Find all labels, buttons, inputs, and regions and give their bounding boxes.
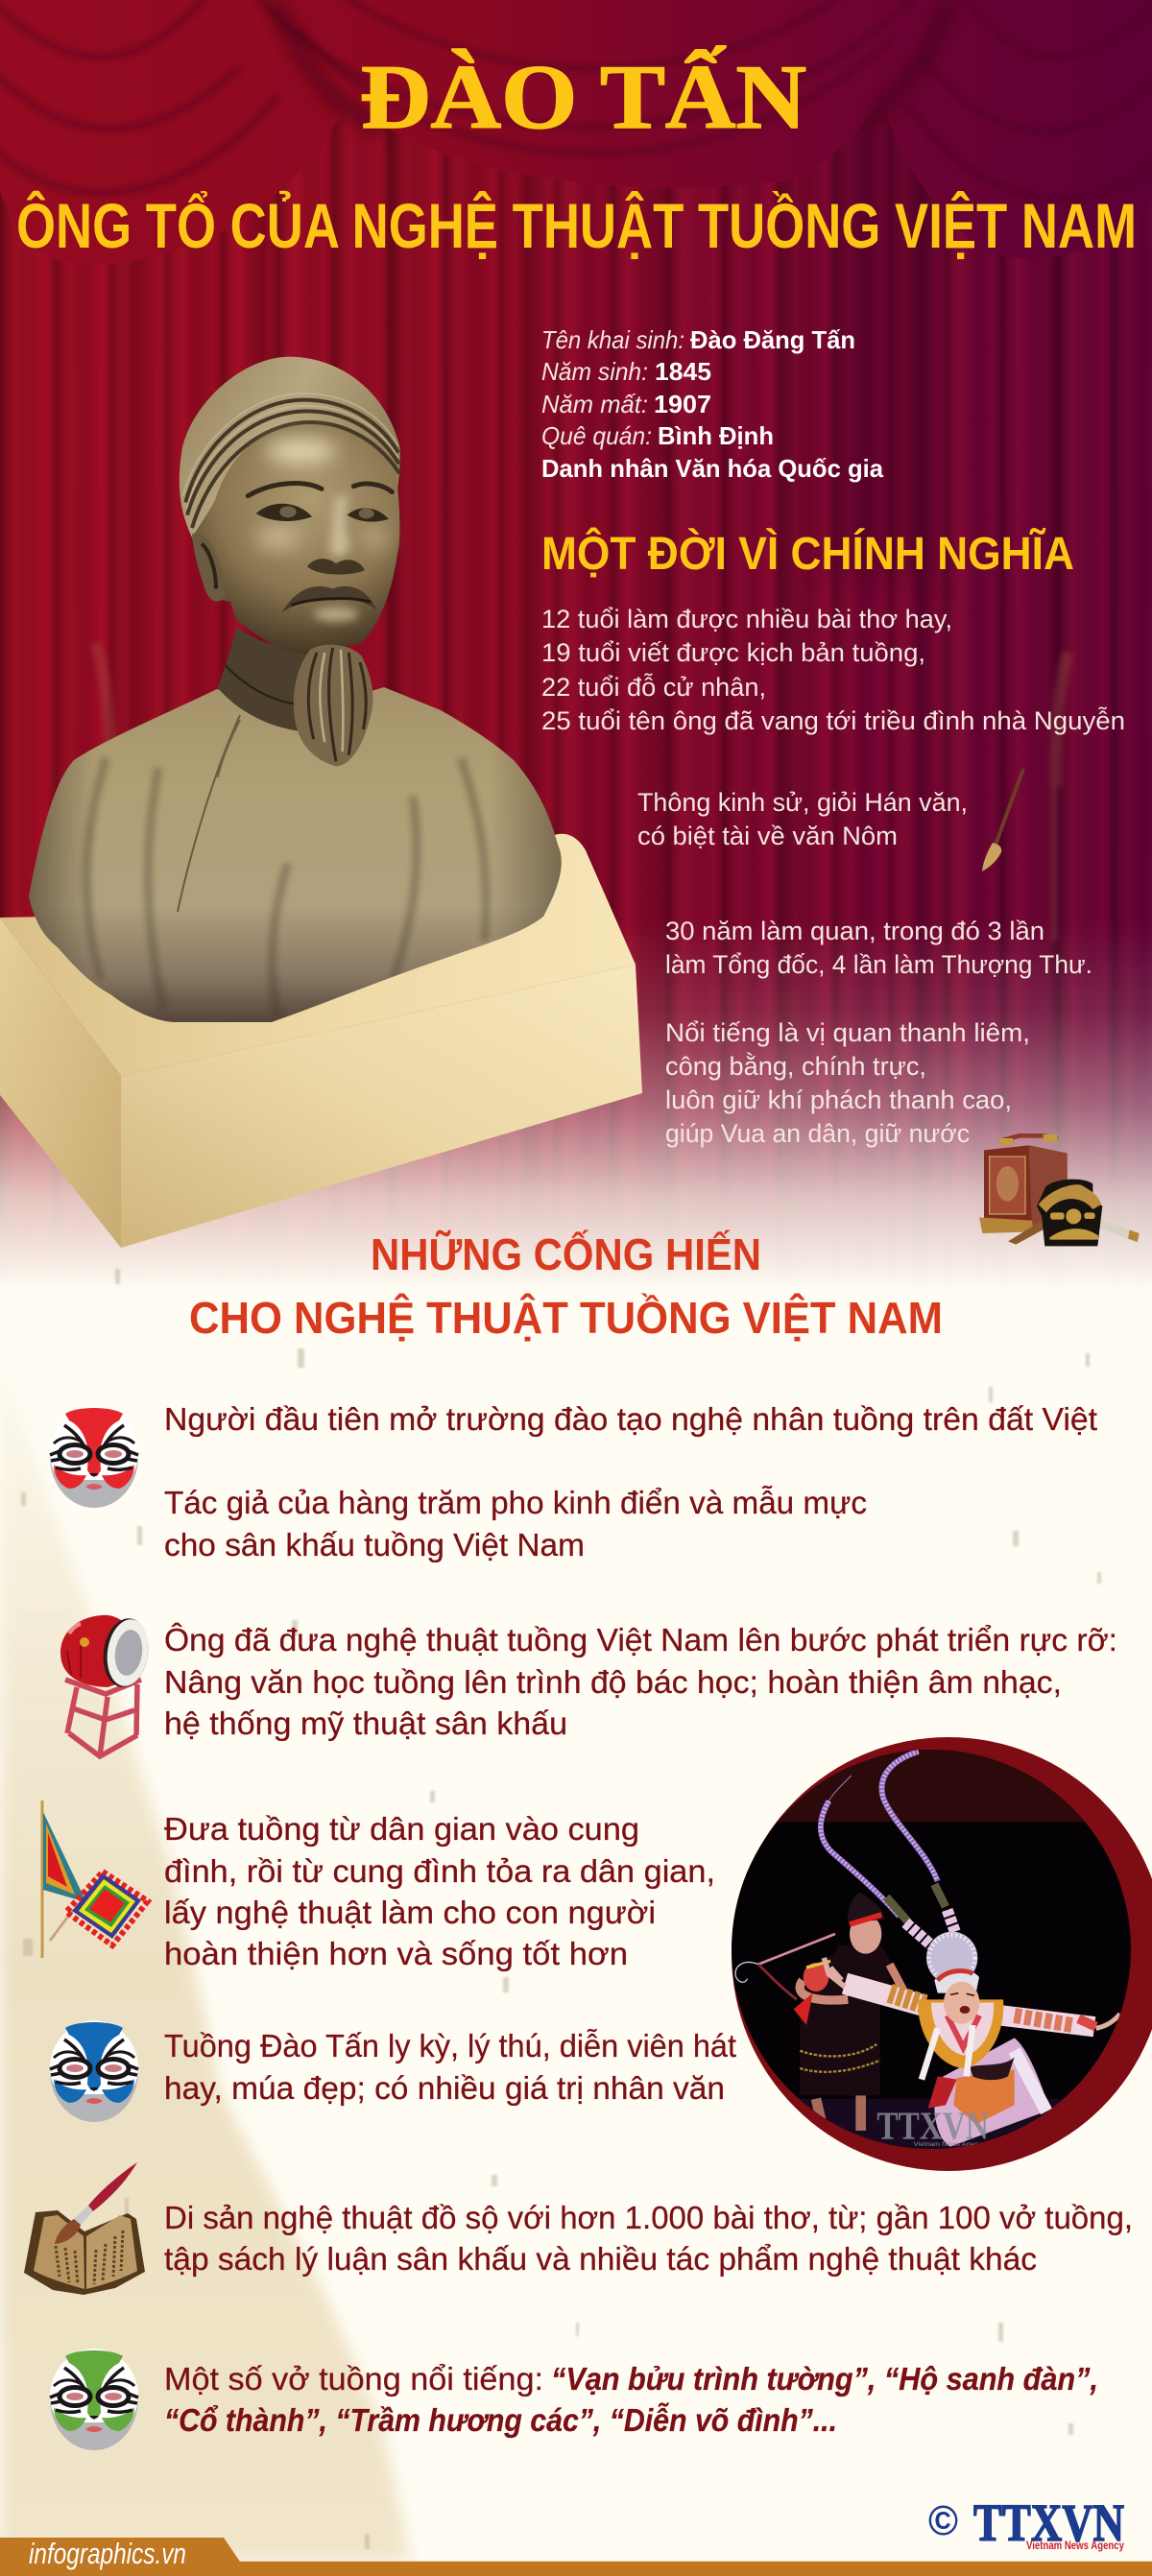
text: court and people: Đưa tuồng từ dân gian vào cung: [164, 1811, 639, 1847]
text: court and people: [164, 1811, 715, 1971]
icon: drum on stand: [60, 1615, 153, 1756]
icon: red opera mask: [50, 1406, 138, 1508]
biography facts: Năm mất:: [541, 390, 648, 418]
text block: career: công bằng, chính trực,: [665, 1051, 926, 1081]
biography facts: 1845: [655, 357, 711, 386]
text block: early life: [541, 605, 1125, 735]
text: famous plays: [164, 2361, 1098, 2438]
photo: tuong performers in a circle: [730, 1737, 1152, 2171]
text: famous plays: “Cổ thành”, “Trầm hương các”, “Diễn võ đình”...: [164, 2402, 837, 2438]
eyebrows: [248, 484, 392, 496]
text: famous plays: “Vạn bửu trình tường”, “Hộ sanh đàn”,: [551, 2361, 1098, 2397]
eyes: [256, 504, 312, 521]
text block: career: luôn giữ khí phách thanh cao,: [665, 1085, 1012, 1114]
logo: TTXVN: Vietnam News Agency: [1026, 2539, 1124, 2552]
biography facts: Quê quán:: [541, 421, 652, 450]
biography facts: Năm sinh:: [541, 357, 648, 386]
title: ĐÀO TẤN: [360, 46, 806, 148]
icon: flags: [42, 1801, 148, 1958]
section heading: contributions: NHỮNG CỐNG HIẾN: [371, 1229, 761, 1279]
biography facts: Bình Định: [658, 421, 774, 450]
text block: career: giúp Vua an dân, giữ nước: [665, 1119, 970, 1148]
face: [192, 420, 399, 655]
icon: old book and brush: [24, 2162, 145, 2295]
text: developing the art: Nâng văn học tuồng lên trình độ bác học; hoàn thiện âm nhạc,: [164, 1664, 1062, 1700]
pedestal: [0, 834, 642, 1248]
bronze statue: [19, 357, 566, 1027]
text block: early life: 22 tuổi đỗ cử nhân,: [541, 672, 766, 702]
text: first school and author: [164, 1401, 1097, 1562]
text: developing the art: Ông đã đưa nghệ thuật tuồng Việt Nam lên bước phát triển rực rỡ:: [164, 1622, 1117, 1658]
icon: writing brush: [982, 769, 1023, 871]
moustache: [281, 586, 377, 612]
turban: [180, 357, 400, 540]
text: appealing shows: [164, 2028, 736, 2106]
text block: career: 30 năm làm quan, trong đó 3 lần: [665, 917, 1044, 945]
logo: TTXVN: ©: [928, 2497, 958, 2544]
biography facts: Tên khai sinh:: [541, 325, 684, 354]
biography facts: Đào Đăng Tấn: [690, 325, 855, 354]
staff: [758, 1934, 835, 1965]
text block: scholarship: [637, 788, 968, 850]
text: heritage: tập sách lý luận sân khấu và nhiều tác phẩm nghệ thuật khác: [164, 2241, 1037, 2277]
icon: blue opera mask: [50, 2020, 138, 2122]
text: heritage: Di sản nghệ thuật đồ sộ với hơn 1.000 bài thơ, từ; gần 100 vở tuồng,: [164, 2200, 1133, 2235]
text: court and people: lấy nghệ thuật làm cho con người: [164, 1895, 656, 1930]
text block: scholarship: Thông kinh sử, giỏi Hán văn,: [637, 788, 968, 817]
beard: [294, 645, 372, 766]
biography facts: [541, 325, 884, 483]
icon: mandarin box and hat: [979, 1134, 1140, 1246]
heading: a life for justice: MỘT ĐỜI VÌ CHÍNH NGHĨA: [541, 527, 1074, 580]
photo watermark: TTXVN: [876, 2104, 989, 2148]
section heading: contributions: [189, 1229, 943, 1343]
main dancer: [934, 2038, 1049, 2147]
nose: [307, 559, 365, 575]
title: [16, 46, 1137, 261]
plumes: [828, 1776, 852, 1801]
logo: TTXVN: [928, 2493, 1124, 2552]
collar: [218, 627, 310, 731]
text: heritage: [164, 2200, 1133, 2277]
second performer: [800, 1945, 892, 2095]
text block: career: [665, 917, 1092, 1148]
text: developing the art: [164, 1622, 1117, 1741]
biography facts: 1907: [654, 390, 711, 418]
text: appealing shows: hay, múa đẹp; có nhiều giá trị nhân văn: [164, 2070, 725, 2106]
icon: green opera mask: [50, 2349, 138, 2450]
bust on pedestal: [0, 357, 642, 1248]
footer bar: [0, 2537, 1152, 2576]
text: first school and author: Tác giả của hàng trăm pho kinh điển và mẫu mực: [164, 1485, 867, 1520]
text block: career: làm Tổng đốc, 4 lần làm Thượng Thư.: [665, 950, 1092, 979]
text: famous plays: Một số vở tuồng nổi tiếng:: [164, 2361, 543, 2397]
text: first school and author: Người đầu tiên mở trường đào tạo nghệ nhân tuồng trên đất Việt: [164, 1401, 1097, 1437]
ear: [192, 533, 226, 602]
section heading: contributions: CHO NGHỆ THUẬT TUỒNG VIỆT NAM: [189, 1293, 943, 1343]
footer bar: infographics.vn: [29, 2537, 186, 2570]
head, collar and beard: [180, 357, 400, 777]
text: court and people: đình, rồi từ cung đình tỏa ra dân gian,: [164, 1853, 715, 1889]
photo: tuong performers in a circle: Vietnam News Agency: [914, 2141, 986, 2148]
text block: early life: 25 tuổi tên ông đã vang tới triều đình nhà Nguyễn: [541, 705, 1125, 735]
text block: scholarship: có biệt tài về văn Nôm: [637, 822, 898, 850]
text block: early life: 12 tuổi làm được nhiều bài thơ hay,: [541, 605, 952, 633]
biography facts: Danh nhân Văn hóa Quốc gia: [541, 454, 884, 483]
text block: career: Nổi tiếng là vị quan thanh liêm,: [665, 1018, 1030, 1047]
text: court and people: hoàn thiện hơn và sống tốt hơn: [164, 1936, 628, 1971]
highlights: [266, 439, 336, 464]
text block: early life: 19 tuổi viết được kịch bản tuồng,: [541, 638, 925, 667]
text: first school and author: cho sân khấu tuồng Việt Nam: [164, 1527, 585, 1562]
text: developing the art: hệ thống mỹ thuật sân khấu: [164, 1705, 567, 1741]
text: appealing shows: Tuồng Đào Tấn ly kỳ, lý thú, diễn viên hát: [164, 2028, 736, 2063]
